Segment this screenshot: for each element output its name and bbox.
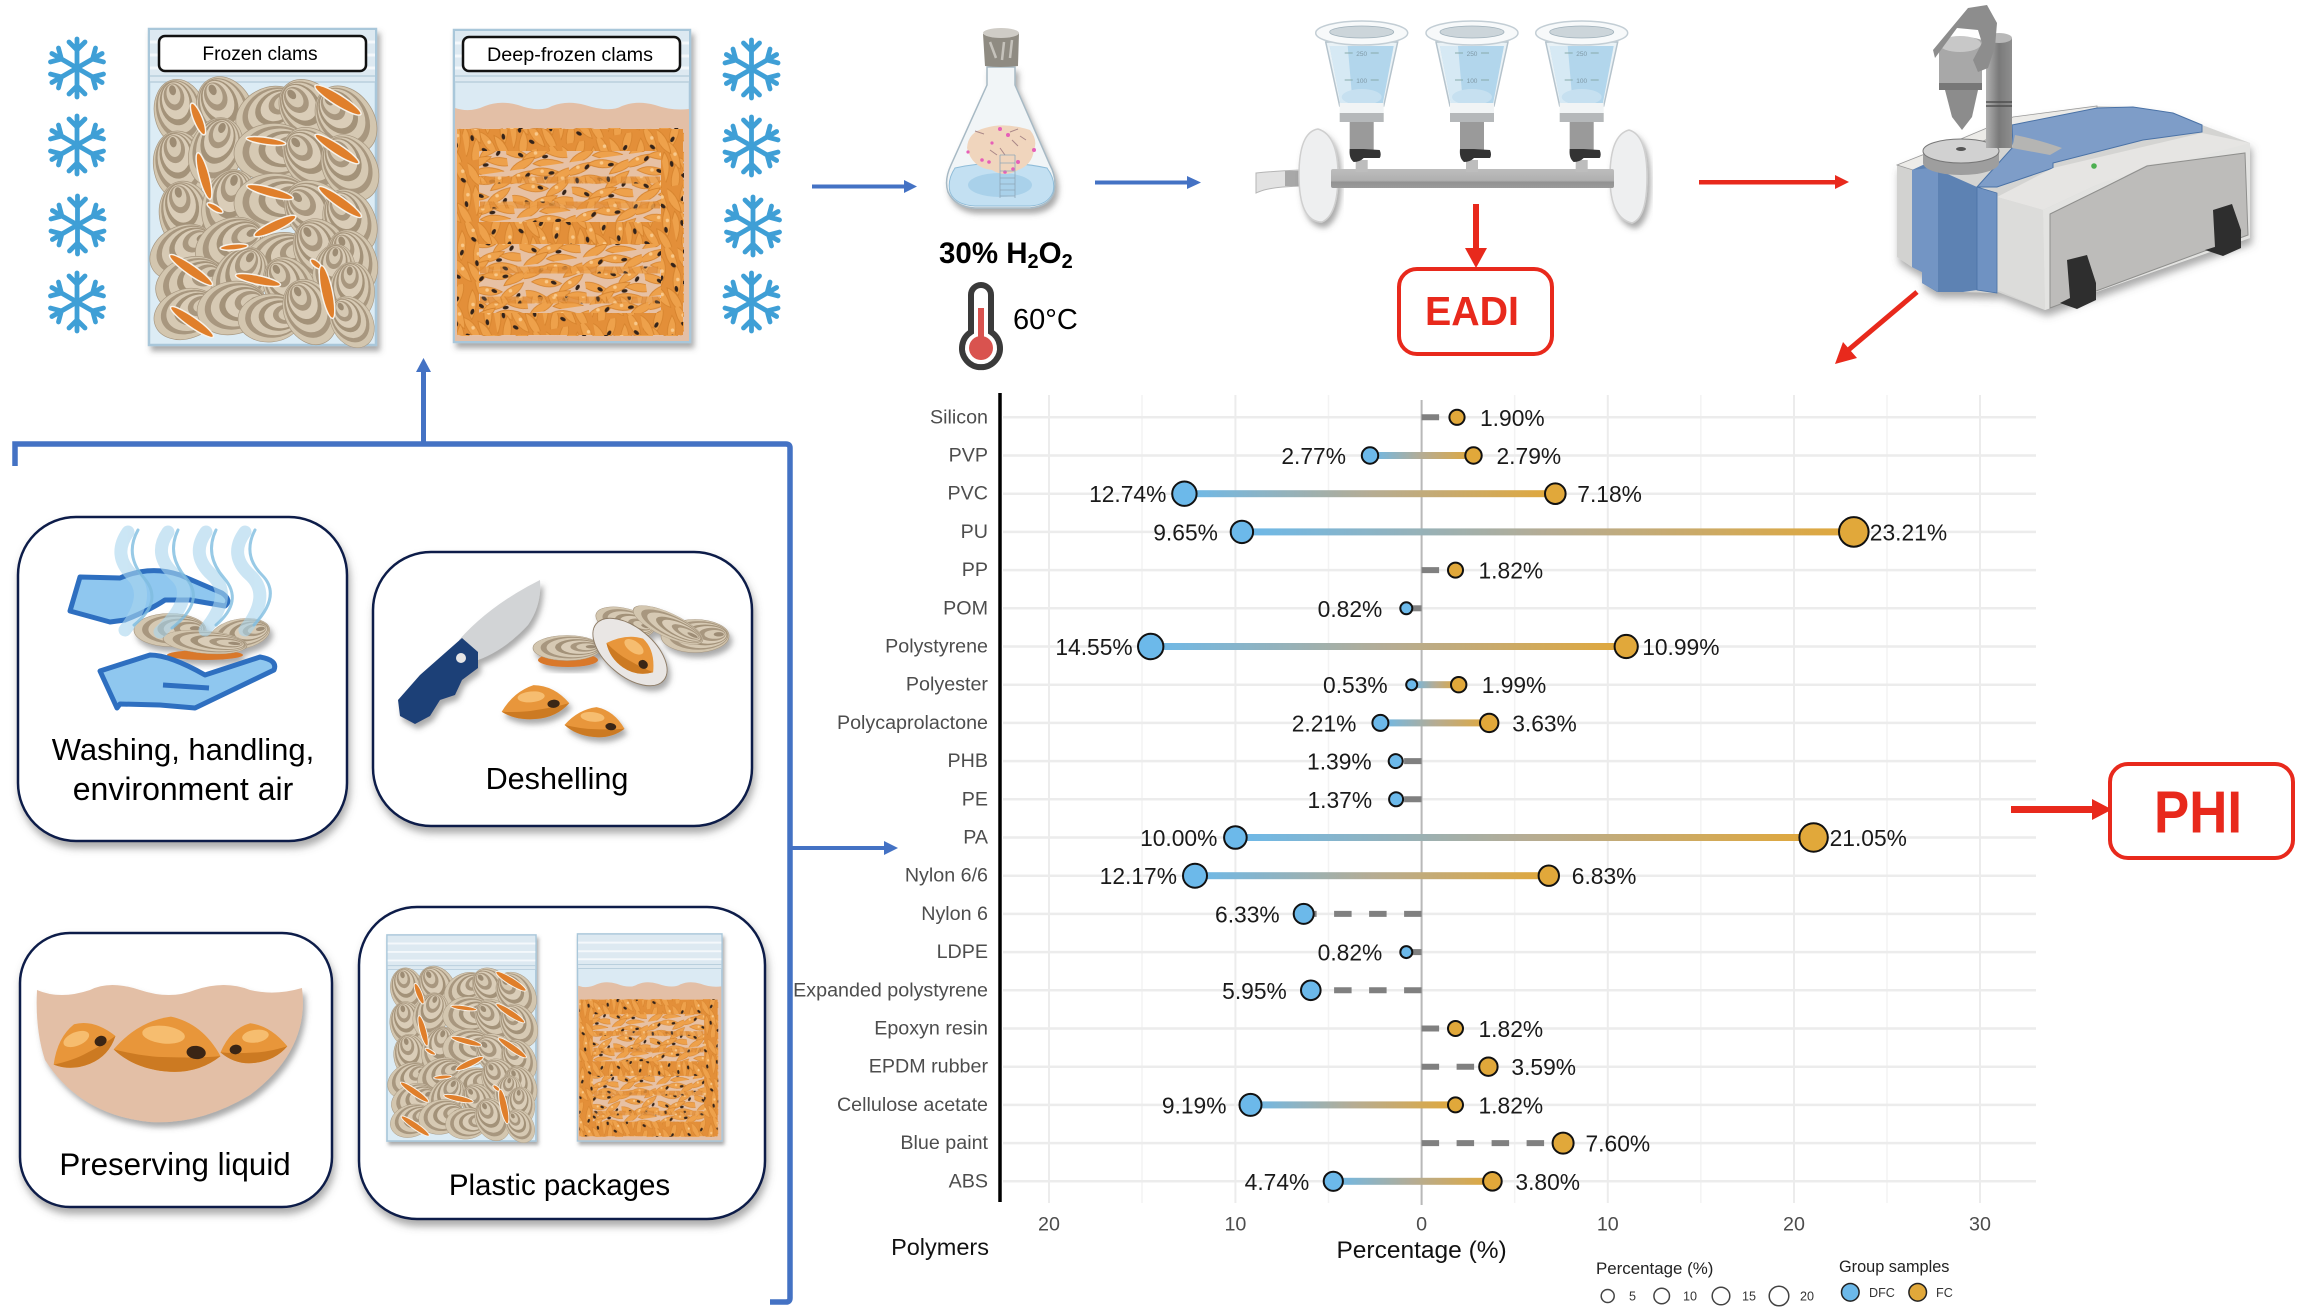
y axis category labels: Nylon 6/6 (905, 865, 988, 887)
icon: clams in hands (134, 614, 272, 660)
panel: preserving liquid (20, 933, 332, 1207)
label: deep-frozen clams: Deep-frozen clams (487, 44, 653, 66)
legend: group samples: FC (1936, 1286, 1953, 1300)
frozen clams bag (140, 29, 390, 356)
label: frozen clams: Frozen clams (202, 44, 318, 65)
text: plastic packages label: Plastic packages (449, 1169, 670, 1202)
legend: percentage size (1596, 1259, 1814, 1306)
DFC value labels: 0.53% (1323, 672, 1388, 698)
text: 30% H2O2: O (1039, 237, 1062, 270)
icon: lower hand (100, 655, 275, 708)
y axis category labels: PE (962, 788, 988, 810)
text: 30% H2O2: 2 (1062, 251, 1073, 273)
panel: plastic packages (359, 907, 765, 1219)
y axis category labels: PHB (948, 750, 988, 772)
FC value labels (1478, 405, 1947, 1195)
y axis category labels: Polyester (906, 674, 988, 696)
FC value labels: 3.59% (1511, 1054, 1576, 1080)
DFC value labels: 5.95% (1222, 978, 1287, 1004)
legend: percentage size: 10 (1683, 1290, 1697, 1304)
FC value labels: 1.99% (1482, 672, 1546, 698)
y axis category labels: POM (943, 597, 988, 619)
y axis category labels: PU (961, 521, 988, 543)
arrow: chart to PHI (2011, 799, 2112, 820)
text: 60°C: 60°C (1013, 304, 1078, 336)
text: environment air label: environment air (73, 771, 294, 807)
arrow: instrument to chart (1835, 292, 1917, 364)
x axis tick labels: 0 (1416, 1214, 1427, 1236)
y axis category labels: PP (962, 559, 988, 581)
FC value labels: 1.82% (1478, 558, 1543, 584)
y axis category labels: Nylon 6 (921, 903, 988, 925)
DFC value labels: 12.74% (1089, 481, 1166, 507)
series: connector lines (1151, 417, 1854, 1185)
text: deshelling label: Deshelling (486, 762, 628, 796)
icon: flask (947, 28, 1055, 208)
series: DFC points (1138, 447, 1417, 1191)
panel: deshelling (373, 552, 752, 826)
FC value labels: 3.80% (1515, 1169, 1580, 1195)
y axis category labels: LDPE (937, 941, 988, 963)
arrow: flask to filter (1095, 176, 1201, 189)
FC value labels: 23.21% (1870, 519, 1947, 545)
FC value labels: 21.05% (1830, 825, 1907, 851)
x axis title: Percentage (%) (1336, 1237, 1507, 1264)
x axis tick labels (1038, 1214, 1991, 1236)
label: frozen clams (159, 36, 366, 71)
FC value labels: 7.60% (1586, 1131, 1650, 1157)
text: preserving liquid label: Preserving liquid (59, 1147, 291, 1182)
FC value labels: 6.83% (1572, 863, 1636, 889)
x axis tick labels: 10 (1224, 1214, 1246, 1236)
icon: knife (398, 580, 540, 724)
y axis category labels (793, 406, 989, 1192)
DFC value labels: 2.77% (1281, 443, 1346, 469)
DFC value labels: 14.55% (1055, 634, 1133, 660)
deep-frozen clams bag (454, 30, 690, 342)
icon: upper hand (70, 571, 228, 622)
y axis category labels: Polystyrene (885, 636, 988, 658)
legend: percentage size: 20 (1800, 1290, 1814, 1304)
DFC value labels: 9.65% (1153, 519, 1218, 545)
y axis category labels: Polycaprolactone (837, 712, 988, 734)
icon: vacuum filtration manifold (1256, 21, 1647, 223)
arrow: filter down to EADI (1465, 204, 1487, 268)
x axis tick labels: 20 (1783, 1214, 1805, 1236)
y axis category labels: ABS (949, 1170, 988, 1192)
FC value labels: 3.63% (1512, 710, 1577, 736)
FC value labels: 2.79% (1496, 443, 1561, 469)
text: 30% H2O2: 2 (1028, 251, 1039, 273)
right snowflakes column (722, 40, 782, 331)
callout: PHI (2110, 764, 2293, 858)
callout: EADI (1399, 269, 1552, 354)
y axis category labels: PA (963, 826, 989, 848)
icon: thermometer (962, 285, 1000, 367)
arrow: bags to flask (812, 180, 917, 193)
text: washing label: Washing, handling, (52, 732, 314, 767)
DFC value labels: 12.17% (1100, 863, 1177, 889)
icon: liquid with clams (37, 985, 303, 1122)
DFC value labels: 0.82% (1318, 940, 1382, 966)
FC value labels: 10.99% (1642, 634, 1720, 660)
DFC value labels: 10.00% (1140, 825, 1217, 851)
x axis tick labels: 10 (1597, 1214, 1619, 1236)
icon: open clam (581, 598, 729, 699)
y axis category labels: Silicon (930, 406, 988, 428)
FC value labels: 1.82% (1478, 1016, 1543, 1042)
legend: percentage size: Percentage (%) (1596, 1259, 1713, 1278)
icon: small deep-frozen clams bag (578, 934, 722, 1141)
legend: group samples: DFC (1869, 1286, 1895, 1300)
icon: small frozen clams bag (381, 935, 545, 1148)
x axis tick labels: 20 (1038, 1214, 1060, 1236)
legend: group samples: Group samples (1839, 1258, 1949, 1276)
DFC value labels: 6.33% (1215, 901, 1280, 927)
y axis category labels: PVC (948, 483, 988, 505)
label: deep-frozen clams (463, 37, 680, 71)
legend: percentage size: 15 (1742, 1290, 1756, 1304)
y axis category labels: EPDM rubber (869, 1056, 988, 1078)
icon: loose clam meat (500, 682, 626, 740)
FC value labels: 7.18% (1577, 481, 1642, 507)
y axis category labels: Blue paint (900, 1132, 989, 1154)
y axis category labels: Expanded polystyrene (793, 979, 988, 1001)
left snowflakes column (48, 39, 107, 331)
chart: polymer percentages dumbbell plot (793, 393, 2036, 1306)
arrow: sources up to bags (416, 358, 431, 446)
panel: washing, handling, environment air (18, 517, 347, 841)
series: FC points (1448, 410, 1869, 1191)
y axis title: Polymers (891, 1234, 989, 1260)
DFC value labels: 0.82% (1318, 596, 1382, 622)
DFC value labels (1055, 443, 1388, 1195)
y axis line (998, 393, 1002, 1202)
legend: percentage size: 5 (1629, 1290, 1636, 1304)
DFC value labels: 1.39% (1307, 749, 1372, 775)
icon: closed clam (533, 635, 601, 667)
FC value labels: 1.82% (1478, 1092, 1543, 1118)
DFC value labels: 2.21% (1292, 710, 1356, 736)
arrow: filter to instrument (1699, 175, 1849, 189)
icon: air wisps (121, 530, 270, 632)
callout: EADI: EADI (1425, 288, 1519, 334)
bracket: contamination sources (15, 444, 790, 1302)
y axis category labels: PVP (949, 444, 988, 466)
icon: micro-FTIR instrument (1897, 5, 2250, 310)
x axis tick labels: 30 (1969, 1214, 1991, 1236)
arrow: sources to chart (792, 841, 898, 855)
y axis category labels: Cellulose acetate (837, 1094, 988, 1116)
DFC value labels: 1.37% (1307, 787, 1372, 813)
callout: PHI: PHI (2154, 780, 2242, 846)
legend: group samples (1839, 1258, 1953, 1301)
instrument blue top (1977, 107, 2202, 187)
y axis category labels: Epoxyn resin (874, 1018, 988, 1040)
DFC value labels: 9.19% (1162, 1092, 1226, 1118)
FC value labels: 1.90% (1480, 405, 1545, 431)
DFC value labels: 4.74% (1245, 1169, 1309, 1195)
text: 30% H2O2: 30% H (939, 237, 1028, 270)
